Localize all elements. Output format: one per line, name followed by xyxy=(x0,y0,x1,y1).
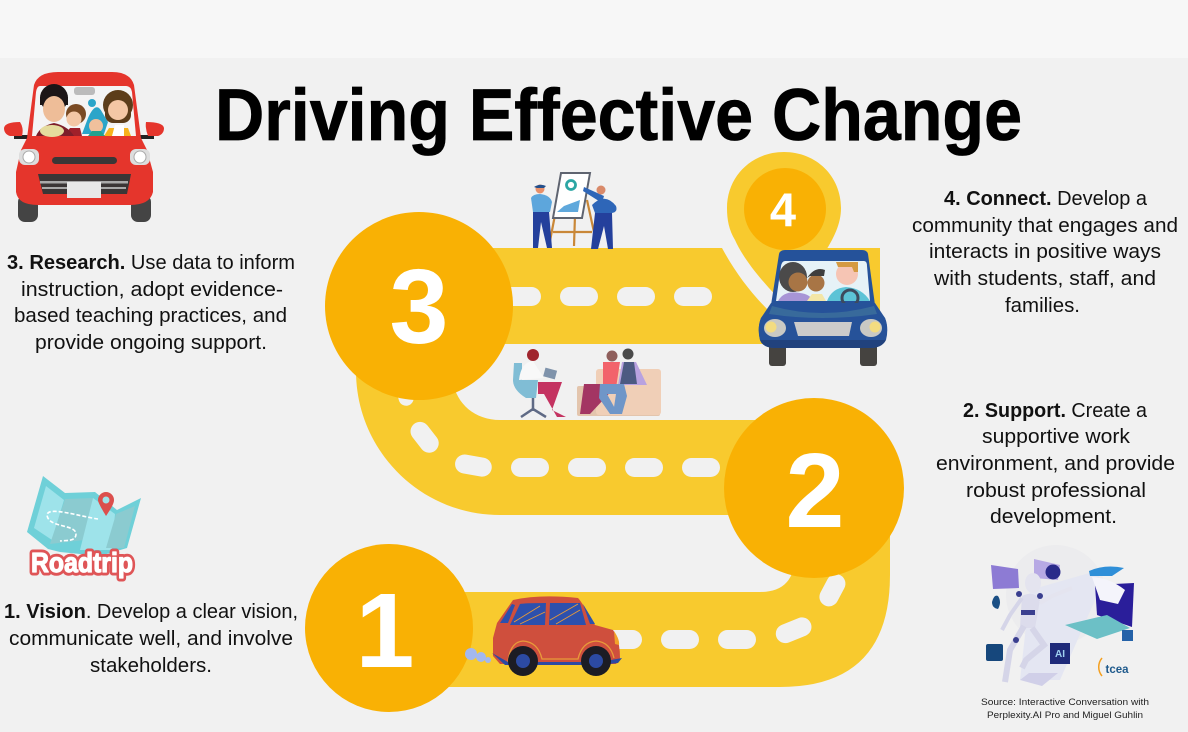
text block: 3. Research: provide ongoing support. xyxy=(35,332,267,354)
text block: 1. Vision: communicate well, and involve xyxy=(9,628,293,650)
icon: people meeting on sofa xyxy=(513,348,661,417)
icon: Roadtrip map logo: Roadtrip xyxy=(31,547,133,578)
number circle 3: 3 xyxy=(390,248,448,366)
marker 4 pin xyxy=(727,152,841,310)
text block: 4. Connect: interacts in positive ways xyxy=(929,241,1161,263)
icon: AI robot and laptop illustration: AI xyxy=(1055,649,1065,660)
text block: 3. Research: based teaching practices, and xyxy=(14,305,287,327)
text block: 3. Research: instruction, adopt evidence- xyxy=(21,279,283,301)
icon: Roadtrip map logo xyxy=(27,476,141,578)
road dashes xyxy=(396,287,849,649)
text block: 1. Vision: 1. Vision. Develop a clear vision, xyxy=(4,601,298,623)
icon: Roadtrip map logo: Roadtrip xyxy=(31,547,133,578)
text block: 2. Support xyxy=(936,400,1175,528)
source credit: Source: Interactive Conversation with xyxy=(981,697,1149,708)
text block: 3. Research xyxy=(7,252,295,354)
text block: 4. Connect: 4. Connect. Develop a xyxy=(944,188,1148,210)
text block: 2. Support: 2. Support. Create a xyxy=(963,400,1148,422)
number circle 1 xyxy=(305,544,473,712)
text block: 2. Support: robust professional xyxy=(966,480,1146,502)
number circle 2: 2 xyxy=(786,432,844,550)
winding road xyxy=(356,248,890,687)
text block: 4. Connect: community that engages and xyxy=(912,215,1178,237)
text block: 3. Research: 3. Research. Use data to inform xyxy=(7,252,295,274)
number circle 3 xyxy=(325,212,513,400)
source credit xyxy=(981,697,1149,721)
text block: 1. Vision xyxy=(4,601,298,677)
source credit: Perplexity.AI Pro and Miguel Guhlin xyxy=(987,710,1143,721)
text block: 4. Connect: families. xyxy=(1005,295,1080,317)
icon: blue family car xyxy=(759,250,887,366)
number circle 2 xyxy=(724,398,904,578)
text block: 2. Support: environment, and provide xyxy=(936,453,1175,475)
title: Driving Effective Change xyxy=(215,75,1022,156)
icon: AI robot and laptop illustration: tcea xyxy=(1105,664,1129,676)
icon: presentation with two people xyxy=(531,173,616,249)
number circle 1: 1 xyxy=(356,572,414,690)
icon: orange car with exhaust xyxy=(465,596,622,676)
icon: AI robot and laptop illustration xyxy=(986,545,1134,686)
text block: 2. Support: supportive work xyxy=(982,426,1131,448)
icon: red family car xyxy=(4,72,164,222)
text block: 4. Connect: with students, staff, and xyxy=(933,268,1156,290)
text block: 2. Support: development. xyxy=(990,506,1117,528)
text block: 1. Vision: stakeholders. xyxy=(90,655,212,677)
text block: 4. Connect xyxy=(912,188,1178,317)
marker 4 pin: 4 xyxy=(770,183,796,236)
